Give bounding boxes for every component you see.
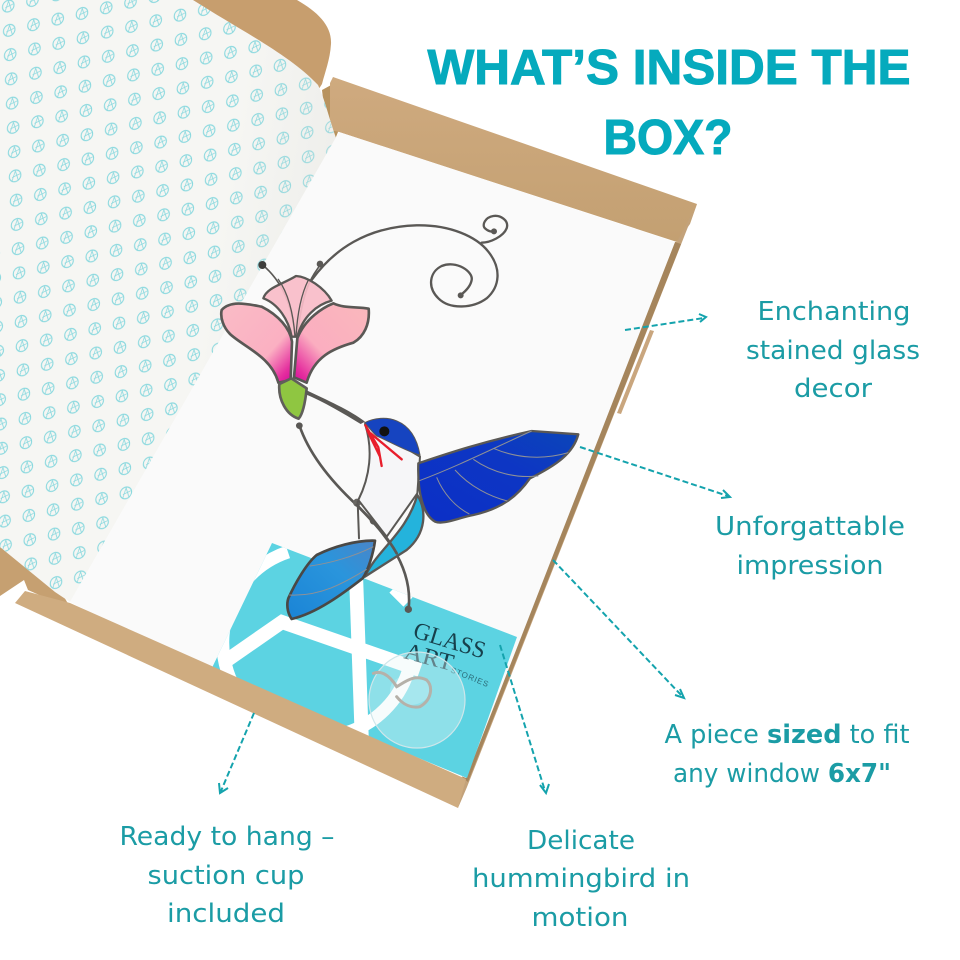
- right wall of box: [458, 204, 697, 808]
- bird tail wing: [287, 541, 375, 619]
- callout: size: A piece sized to fit: [664, 720, 910, 750]
- top lid flap: [190, 0, 331, 95]
- cardboard box walls: [0, 0, 697, 808]
- brand card: [210, 543, 517, 778]
- callout: hummingbird: motion: [532, 903, 628, 933]
- suction cup with hook: [369, 652, 465, 748]
- bird upper wing: [418, 431, 578, 523]
- callout: size: [664, 720, 910, 789]
- title: BOX?: [604, 111, 732, 165]
- callout: suction cup: [120, 822, 334, 929]
- callout: stained glass decor: Enchanting: [758, 297, 910, 327]
- arrow: size: [553, 560, 684, 698]
- flower back petal: [263, 276, 332, 337]
- hanging wire: [312, 225, 498, 306]
- callout: impression: impression: [736, 551, 884, 581]
- arrow: suction cup: [219, 713, 254, 793]
- card brand text: GLASS: [410, 618, 489, 664]
- callout: size: any window 6x7": [673, 759, 891, 789]
- callout: stained glass decor: decor: [794, 374, 872, 404]
- callout: stained glass decor: stained glass: [746, 336, 920, 366]
- callout: hummingbird: Delicate: [527, 826, 635, 856]
- front wall of box: [15, 591, 466, 808]
- callout: hummingbird: [472, 826, 690, 933]
- callout: impression: Unforgattable: [715, 512, 905, 542]
- card brand text: STORIES: [449, 666, 490, 689]
- left corner of box: [0, 547, 70, 607]
- title: [428, 41, 910, 165]
- callout: suction cup: included: [167, 899, 285, 929]
- callout: hummingbird: hummingbird in: [472, 864, 690, 894]
- card brand text: ART: [401, 639, 457, 677]
- card logo circle: [223, 552, 408, 737]
- callout: suction cup: Ready to hang –: [120, 822, 334, 852]
- stained glass hummingbird and flower: [221, 216, 578, 619]
- card brand text: [401, 618, 490, 689]
- card logo X: [223, 575, 420, 745]
- foam insert: [70, 132, 675, 778]
- flower stem: [299, 425, 409, 608]
- bird head: [365, 418, 420, 455]
- title: WHAT’S INSIDE THE: [428, 41, 910, 95]
- bird belly: [358, 424, 420, 537]
- arrow: hummingbird: [500, 645, 549, 793]
- small inner flap: [322, 84, 338, 142]
- arrow: impression: [580, 447, 730, 498]
- arrow: stained glass decor: [625, 314, 706, 330]
- callout: impression: [715, 512, 905, 581]
- tissue paper lining: [0, 0, 336, 602]
- flower calyx: [279, 378, 307, 419]
- callout: stained glass decor: [746, 297, 920, 404]
- flower right petal: [294, 303, 369, 383]
- back wall of box: [330, 77, 697, 242]
- callout: suction cup: suction cup: [148, 861, 304, 891]
- bird beak: [305, 390, 365, 424]
- bird throat: [365, 425, 402, 466]
- bird body blue: [365, 495, 423, 577]
- flower left petal: [221, 304, 292, 383]
- antennae: [263, 265, 320, 337]
